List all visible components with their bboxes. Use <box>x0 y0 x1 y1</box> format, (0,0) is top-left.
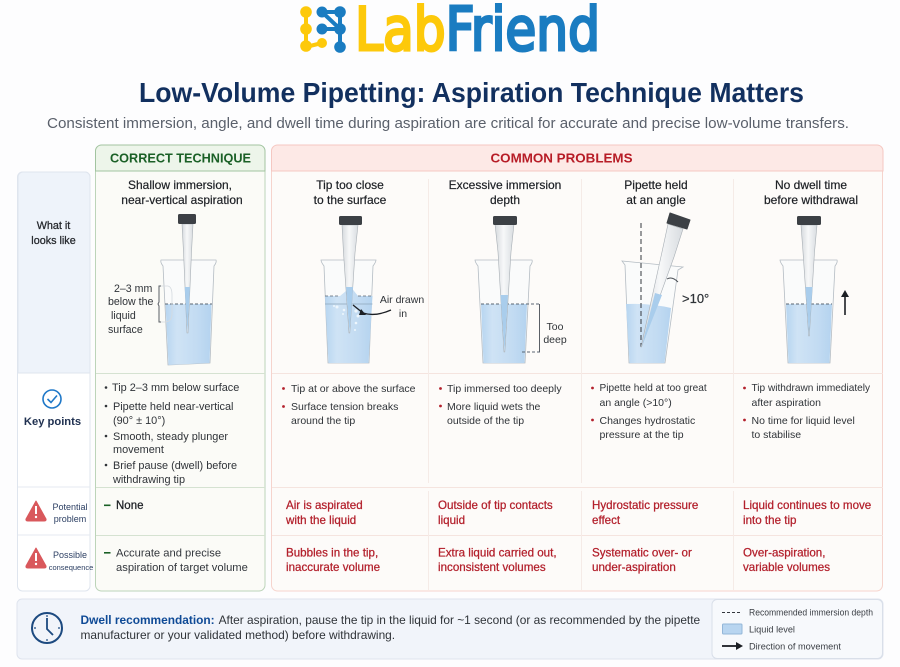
column: tip too close <box>282 178 424 574</box>
key points list: Smooth, steady plunger <box>113 431 228 443</box>
annotation: Too <box>547 321 564 333</box>
label: what it looks like: What it <box>37 220 70 232</box>
possible consequence: inaccurate volume <box>286 561 380 574</box>
potential problem: Hydrostatic pressure <box>592 499 698 512</box>
column heading: to the surface <box>314 193 387 207</box>
possible consequence: Over-aspiration, <box>743 546 825 560</box>
key points list: Pipette held near-vertical <box>113 401 233 413</box>
panel: common problems <box>272 145 883 591</box>
key points list: after aspiration <box>752 397 821 409</box>
column heading: at an angle <box>626 193 686 207</box>
illustration: correct pipette in beaker <box>108 214 216 365</box>
callout text: manufacturer or your validated method) before withdrawing. <box>80 628 395 642</box>
potential problem: Air is aspirated <box>286 499 363 512</box>
icon: clock <box>32 613 62 643</box>
arrow: withdrawal <box>844 295 846 315</box>
key points list: Tip immersed too deeply <box>447 383 562 395</box>
annotation: >10° <box>682 291 709 306</box>
column heading: Shallow immersion, <box>128 178 232 192</box>
annotation: surface <box>108 324 143 336</box>
possible consequence: variable volumes <box>743 561 830 574</box>
key points list: around the tip <box>291 415 355 427</box>
logo <box>300 0 600 65</box>
potential problem: into the tip <box>743 514 796 527</box>
column: excessive immersion <box>438 178 567 574</box>
legend <box>712 600 882 658</box>
logo mark <box>300 6 346 53</box>
panel: row labels <box>18 172 93 591</box>
potential problem: with the liquid <box>285 514 356 527</box>
column heading: near-vertical aspiration <box>121 193 243 207</box>
heading: common problems <box>272 145 883 171</box>
key points list: (90° ± 10°) <box>113 415 165 427</box>
arrow: air drawn in <box>353 305 391 314</box>
panel: dwell recommendation <box>17 599 883 659</box>
legend: liquid level: Liquid level <box>749 624 795 634</box>
title: Low-Volume Pipetting: Aspiration Technique Matters <box>139 77 804 108</box>
annotation: 2–3 mm <box>114 283 152 295</box>
potential problem: Outside of tip contacts <box>438 499 553 512</box>
consequence: accurate: aspiration of target volume <box>116 562 248 574</box>
label: possible consequence: consequence <box>49 563 93 572</box>
potential problem: Liquid continues to move <box>743 499 871 512</box>
annotation: below the <box>108 296 153 308</box>
key points list: to stabilise <box>752 429 801 441</box>
key points list: withdrawing tip <box>112 474 185 486</box>
consequence: accurate: Accurate and precise <box>116 548 221 560</box>
icon: warning possible consequence <box>26 548 46 568</box>
legend: liquid level <box>722 624 795 634</box>
key points list <box>105 382 239 486</box>
potential problem: liquid <box>438 514 465 527</box>
possible consequence: Systematic over- or <box>592 546 692 560</box>
column heading: No dwell time <box>775 178 847 192</box>
potential problem: effect <box>592 514 621 527</box>
consequence: accurate <box>104 548 248 574</box>
column: held at an angle <box>591 178 709 574</box>
annotation: Air drawn <box>380 294 424 306</box>
annotation: liquid <box>111 310 136 322</box>
possible consequence: Bubbles in the tip, <box>286 546 378 560</box>
label: what it looks like: looks like <box>31 235 76 247</box>
key points list: No time for liquid level <box>752 415 855 427</box>
key points list: Brief pause (dwell) before <box>113 460 237 472</box>
potential problem: none <box>104 500 144 512</box>
possible consequence: under-aspiration <box>592 561 676 574</box>
column heading: Tip too close <box>316 178 384 192</box>
column: no dwell time <box>743 178 871 574</box>
annotation: deep <box>543 334 567 346</box>
key points list: Tip 2–3 mm below surface <box>112 382 239 394</box>
potential problem: none: None <box>116 500 144 512</box>
key points list <box>282 383 416 427</box>
callout text: After aspiration, pause the tip in the liquid for ~1 second (or as recommended by the pipette <box>219 613 701 627</box>
key points list: Tip at or above the surface <box>291 383 416 395</box>
heading: common problems: COMMON PROBLEMS <box>490 152 632 166</box>
key points list: pressure at the tip <box>600 429 684 441</box>
legend: direction of movement: Direction of movement <box>749 642 841 652</box>
label: potential problem: Potential <box>52 502 88 512</box>
possible consequence: Extra liquid carried out, <box>438 546 557 560</box>
illustration: angled pipette <box>622 213 709 363</box>
key points list: Surface tension breaks <box>291 401 398 413</box>
key points list: Changes hydrostatic <box>600 415 695 427</box>
bracket <box>158 286 161 322</box>
legend: immersion depth: Recommended immersion depth <box>749 608 873 618</box>
label: possible consequence: Possible <box>53 550 87 560</box>
bubbles <box>333 305 360 331</box>
column heading: Pipette held <box>624 178 688 192</box>
possible consequence: inconsistent volumes <box>438 561 546 574</box>
column heading: Excessive immersion <box>449 178 561 192</box>
key points list: movement <box>113 444 164 456</box>
key points list: outside of the tip <box>447 415 524 427</box>
key points list <box>743 383 871 441</box>
key points list <box>591 383 707 441</box>
illustration: no dwell <box>780 216 849 363</box>
column heading: before withdrawal <box>764 193 858 207</box>
column heading: depth <box>490 193 520 207</box>
subtitle: Consistent immersion, angle, and dwell time during aspiration are critical for accurate and precise low-volume transfers. <box>47 115 849 132</box>
key points list: Tip withdrawn immediately <box>752 383 871 394</box>
callout text: Dwell recommendation: <box>80 613 215 627</box>
depth bracket <box>522 351 540 353</box>
label: potential problem: problem <box>54 514 86 524</box>
heading: correct technique <box>96 145 265 171</box>
key points list: Pipette held at too great <box>600 383 707 394</box>
icon: warning potential problem <box>26 501 46 521</box>
icon: check circle <box>43 390 61 408</box>
key points list <box>439 383 562 427</box>
key points list: an angle (>10°) <box>600 397 672 409</box>
angle arc <box>667 278 678 282</box>
heading: correct technique: CORRECT TECHNIQUE <box>110 152 251 166</box>
panel: correct technique <box>96 145 265 591</box>
key points list: More liquid wets the <box>447 401 541 413</box>
label: key points: Key points <box>24 416 81 428</box>
illustration: tip too close <box>321 216 424 363</box>
illustration: too deep <box>475 216 567 363</box>
annotation: in <box>399 308 407 320</box>
